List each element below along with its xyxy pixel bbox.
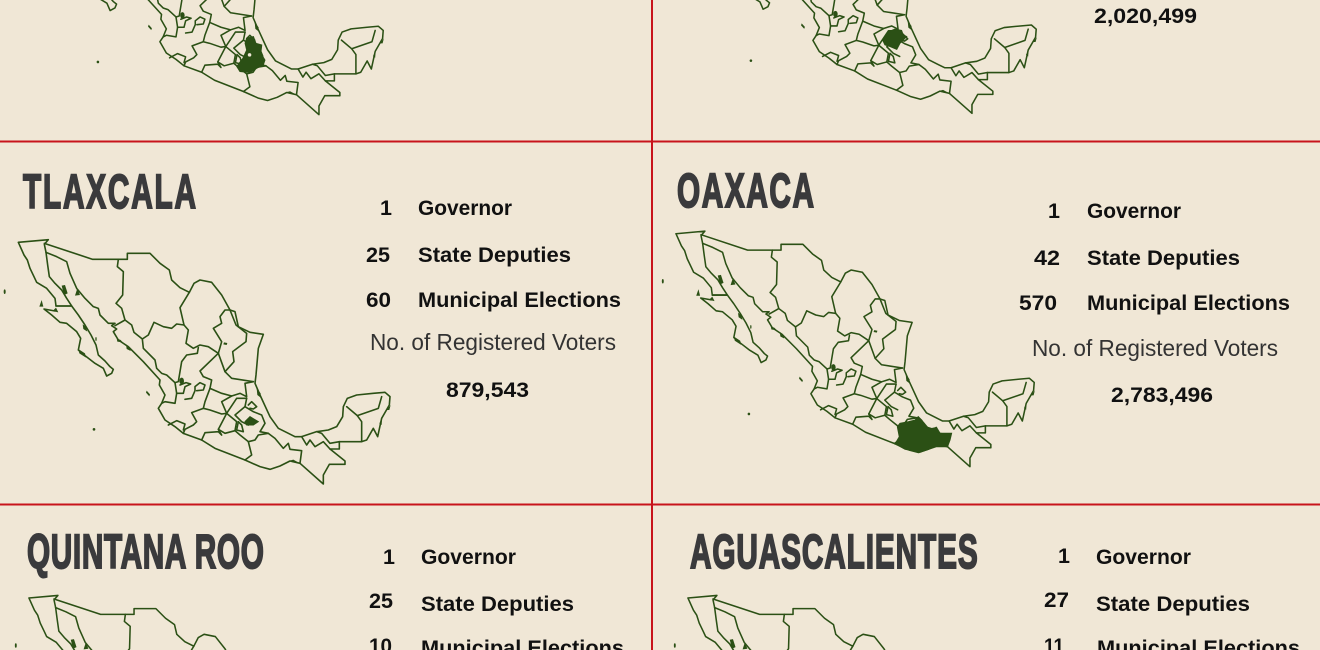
stats: Aguascalientes: Governor — [1096, 545, 1192, 569]
stats: Tlaxcala — [366, 196, 621, 402]
stats: Tlaxcala: No. of Registered Voters — [370, 329, 616, 355]
panel: Quintana Roo — [15, 526, 624, 650]
stats: Tlaxcala: Governor — [418, 196, 513, 220]
stats: Quintana Roo — [369, 545, 624, 650]
panel: Aguascalientes — [674, 526, 1300, 650]
map: Tlaxcala highlighted — [4, 240, 391, 484]
stats: Aguascalientes — [1044, 544, 1300, 650]
map: Quintana Roo — [15, 595, 388, 650]
heading: Oaxaca: OAXACA — [677, 165, 814, 218]
stats: Tlaxcala: Municipal Elections — [418, 288, 621, 312]
stats: Oaxaca: No. of Registered Voters — [1032, 335, 1278, 361]
panel: Tlaxcala — [4, 166, 621, 484]
map: top right state, Hidalgo highlighted — [664, 0, 1037, 113]
heading: Quintana Roo: QUINTANA ROO — [27, 526, 264, 579]
stats: Aguascalientes: 27 — [1044, 588, 1069, 612]
map: Aguascalientes — [674, 595, 1047, 650]
top right voter count: 2,020,499 — [1094, 4, 1197, 28]
stats: Oaxaca — [1019, 199, 1290, 407]
stats: Tlaxcala: 1 — [380, 196, 392, 220]
stats: Quintana Roo: Governor — [421, 545, 517, 569]
panel: Oaxaca — [662, 165, 1290, 467]
stats: Aguascalientes: State Deputies — [1096, 592, 1250, 616]
stats: Oaxaca: 1 — [1048, 199, 1060, 223]
stats: Oaxaca: 2,783,496 — [1111, 383, 1213, 407]
stats: Oaxaca: Governor — [1087, 199, 1182, 223]
stats: Aguascalientes: 1 — [1058, 544, 1070, 568]
map: Oaxaca highlighted — [662, 231, 1035, 467]
heading: Aguascalientes: AGUASCALIENTES — [690, 526, 978, 579]
heading: Tlaxcala: TLAXCALA — [23, 166, 196, 219]
stats: Tlaxcala: 60 — [366, 288, 391, 312]
stats: Oaxaca: Municipal Elections — [1087, 291, 1290, 315]
stats: Oaxaca: 42 — [1034, 246, 1060, 270]
map: top left state, Puebla highlighted — [11, 0, 384, 115]
stats: Tlaxcala: 879,543 — [446, 378, 529, 402]
stats: Tlaxcala: State Deputies — [418, 243, 571, 267]
stats: Quintana Roo: 1 — [383, 545, 395, 569]
stats: Oaxaca: State Deputies — [1087, 246, 1240, 270]
stats: Quintana Roo: State Deputies — [421, 592, 574, 616]
stats: Tlaxcala: 25 — [366, 243, 390, 267]
stats: Quintana Roo: 25 — [369, 589, 393, 613]
stats: Oaxaca: 570 — [1019, 291, 1057, 315]
